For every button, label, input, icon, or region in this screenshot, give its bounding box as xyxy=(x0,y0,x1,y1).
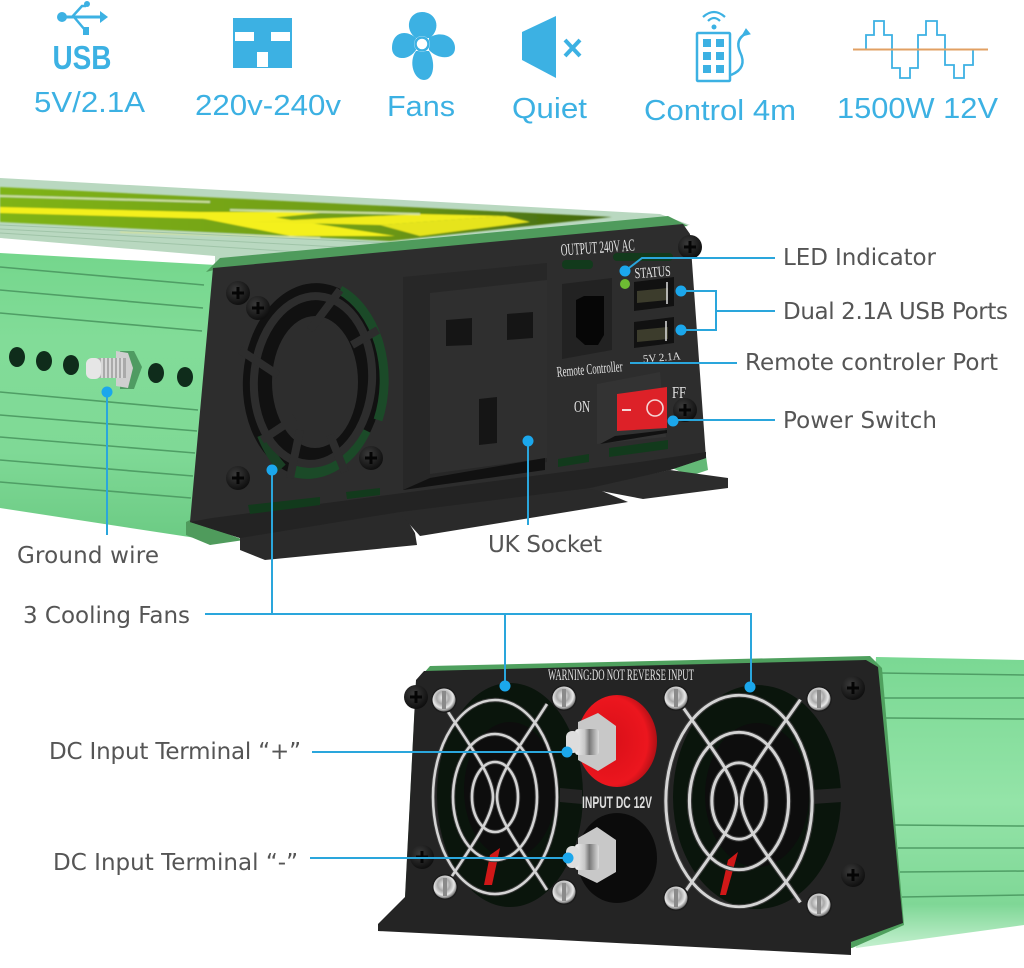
callout: DC Input Terminal + xyxy=(49,739,572,765)
icon row xyxy=(34,1,999,127)
callout: Power Switch: Power Switch xyxy=(783,408,937,434)
callout: 3 Cooling Fans xyxy=(23,464,756,692)
icon: USB xyxy=(52,1,112,76)
label: Quiet: Quiet xyxy=(512,93,587,125)
printed panel text: ON xyxy=(574,397,590,416)
black corner screws xyxy=(404,676,865,887)
panel text: INPUT DC 12V xyxy=(582,793,652,812)
icon: fan xyxy=(392,12,455,80)
fan openings xyxy=(437,683,842,909)
ground bolt xyxy=(86,351,142,389)
callout: Ground wire: Ground wire xyxy=(17,543,159,569)
icon: modified sine wave xyxy=(853,21,988,78)
fan guard: right xyxy=(666,695,812,907)
callout: Dual USB Ports xyxy=(676,286,1008,336)
inverter: output end view xyxy=(0,178,728,560)
top panel with fins xyxy=(0,178,690,268)
callout: DC Input Terminal +: DC Input Terminal “+” xyxy=(49,739,301,765)
USB ports xyxy=(634,277,674,348)
green rim xyxy=(405,656,904,948)
printed panel text: OUTPUT 240V AC xyxy=(560,235,635,260)
printed panel text xyxy=(556,235,686,416)
callout: LED Indicator xyxy=(620,245,937,276)
green side of case xyxy=(856,657,1024,948)
printed panel text: FF xyxy=(672,383,686,402)
panel text: WARNING:DO NOT REVERSE INPUT xyxy=(548,667,694,684)
label: 5V/2.1A: 5V/2.1A xyxy=(34,87,146,119)
icon: quiet speaker xyxy=(522,16,580,78)
panel text xyxy=(548,667,694,812)
callout: DC Input Terminal - xyxy=(53,850,574,876)
printed panel text: 5V 2.1A xyxy=(642,350,681,366)
power switch xyxy=(597,372,667,444)
green rim of end plate xyxy=(186,216,708,545)
callout: Ground wire xyxy=(17,386,159,569)
cooling fan grille xyxy=(236,278,390,482)
callout: 3 Cooling Fans: 3 Cooling Fans xyxy=(23,603,190,629)
callout: LED Indicator: LED Indicator xyxy=(783,245,937,271)
callout: DC Input Terminal -: DC Input Terminal “-” xyxy=(53,850,298,876)
icon: socket xyxy=(233,18,292,68)
callout: Remote controler Port: Remote controler Port xyxy=(745,350,998,376)
end plate xyxy=(190,224,706,538)
label: 1500W 12V: 1500W 12V xyxy=(837,93,999,125)
callout: Power Switch xyxy=(668,408,937,434)
end plate xyxy=(378,660,903,955)
callout: UK Socket xyxy=(488,436,602,558)
printed panel text: STATUS xyxy=(634,264,671,282)
status LED xyxy=(620,279,630,289)
callout: UK Socket: UK Socket xyxy=(488,532,602,558)
vent holes xyxy=(9,347,193,387)
vent slits xyxy=(248,253,673,514)
label: Control 4m: Control 4m xyxy=(644,95,796,127)
foot brackets xyxy=(240,470,728,560)
callout: Dual USB Ports: Dual 2.1A USB Ports xyxy=(783,299,1008,325)
remote controller port xyxy=(562,278,612,359)
label: Fans: Fans xyxy=(387,91,455,123)
icon: remote control xyxy=(697,12,750,81)
fan guard: left xyxy=(433,700,557,894)
side of case xyxy=(0,238,216,545)
inverter: input end view xyxy=(378,656,1024,955)
UK socket xyxy=(403,263,547,490)
silver guard screws xyxy=(431,685,832,918)
icon: USB: USB xyxy=(52,39,112,76)
negative terminal xyxy=(566,813,657,903)
label: 220v-240v: 220v-240v xyxy=(195,90,342,122)
printed panel text: Remote Controller xyxy=(556,359,623,381)
positive terminal xyxy=(566,695,657,787)
screws xyxy=(226,235,702,490)
